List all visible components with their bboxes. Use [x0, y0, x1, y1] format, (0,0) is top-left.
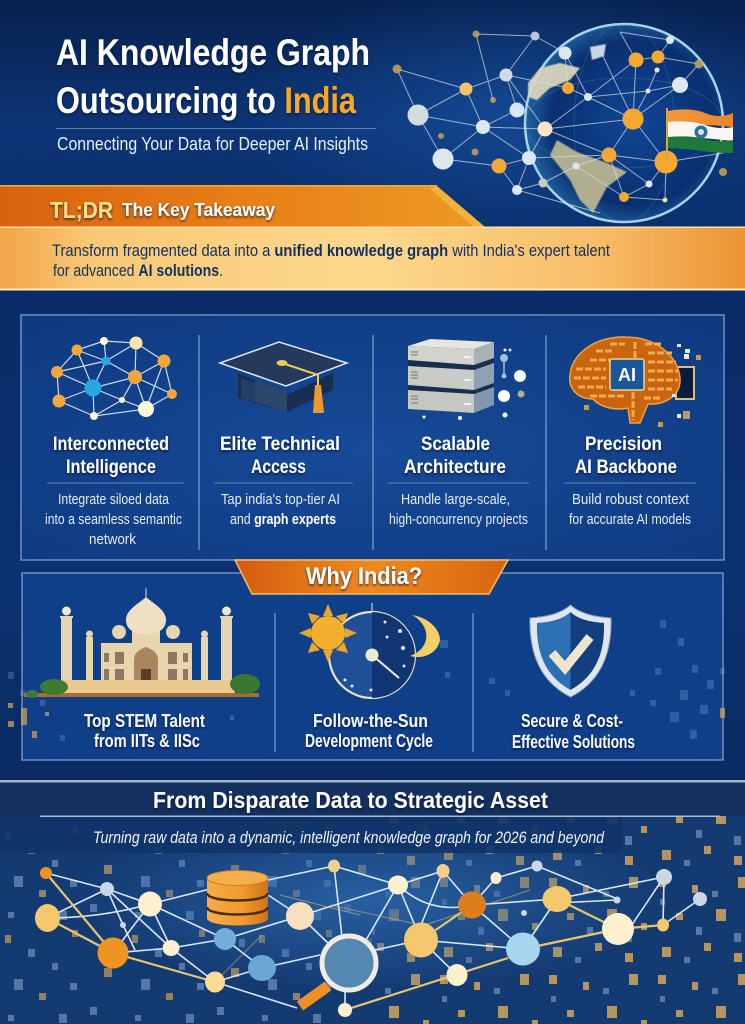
- icon: AI brain: [570, 337, 701, 427]
- takeaway panel: [0, 226, 745, 290]
- card 4 text: [569, 434, 691, 528]
- card 4 text: Build robust context: [572, 492, 689, 508]
- card 3 text: [389, 434, 528, 528]
- icon: database: [207, 870, 268, 926]
- card 2 text: Elite Technical: [220, 434, 340, 455]
- scattered data squares: [0, 812, 745, 1024]
- takeaway text: [52, 242, 610, 280]
- header section: [0, 0, 745, 240]
- icon: sun and clock: [299, 603, 440, 698]
- icon: India flag: [666, 108, 733, 160]
- icon: AI brain: AI: [618, 365, 636, 385]
- card 1 text: into a seamless semantic: [45, 512, 182, 528]
- why India banner: [235, 560, 508, 594]
- section subtitle: Turning raw data into a dynamic, intelligent knowledge graph for 2026 and beyond: [93, 829, 605, 847]
- icon: security shield: [530, 605, 611, 697]
- data squares decoration: [8, 620, 725, 741]
- bottom section: [0, 780, 745, 1024]
- column labels: [84, 711, 635, 752]
- card 2 text: Tap india's top-tier AI: [221, 492, 340, 508]
- panel: four benefits: [21, 315, 724, 560]
- title: Outsourcing to India: [56, 80, 356, 121]
- icon: Taj Mahal: [24, 588, 260, 698]
- card 4 text: Precision: [585, 434, 662, 455]
- TL;DR heading: TL;DR: [50, 197, 113, 223]
- subtitle: Connecting Your Data for Deeper AI Insights: [57, 133, 368, 154]
- TL;DR heading: [50, 197, 276, 223]
- takeaway text: Transform fragmented data into a unified knowledge graph with India's expert talent: [52, 242, 610, 260]
- column labels: Development Cycle: [305, 731, 433, 751]
- card 4 text: AI Backbone: [575, 457, 677, 478]
- column labels: Top STEM Talent: [84, 711, 205, 731]
- card 3 text: high-concurrency projects: [389, 512, 528, 528]
- why India banner: Why India?: [306, 563, 422, 590]
- card 2 text: and graph experts: [230, 512, 336, 528]
- section heading: From Disparate Data to Strategic Asset: [153, 787, 548, 813]
- TL;DR banner: [0, 185, 485, 227]
- icon: interconnected network: [51, 336, 177, 420]
- card 3 text: Handle large-scale,: [401, 492, 510, 508]
- column labels: Effective Solutions: [512, 732, 635, 752]
- card 4 text: for accurate AI models: [569, 512, 691, 528]
- icon: magnifying glass: [300, 936, 376, 1006]
- title: [56, 32, 370, 121]
- panel: why India: [8, 573, 725, 760]
- card 1 text: Integrate siloed data: [58, 492, 170, 508]
- column labels: from IITs & IISc: [94, 731, 200, 751]
- column labels: Secure & Cost-: [521, 711, 623, 731]
- takeaway text: for advanced AI solutions.: [53, 262, 223, 280]
- TL;DR heading: The Key Takeaway: [122, 199, 276, 220]
- title: AI Knowledge Graph: [56, 32, 370, 73]
- knowledge graph network: [35, 860, 707, 1017]
- icon: server stack: [408, 339, 526, 420]
- card 3 text: Architecture: [404, 457, 506, 478]
- network over globe: [392, 30, 727, 213]
- globe: [525, 24, 723, 222]
- card 1 text: network: [89, 532, 137, 548]
- heading band: [0, 780, 745, 853]
- card 1 text: [45, 434, 182, 548]
- card 3 text: Scalable: [421, 434, 490, 455]
- card 1 text: Intelligence: [66, 457, 156, 478]
- card 1 text: Interconnected: [53, 434, 169, 455]
- column labels: Follow-the-Sun: [313, 711, 428, 731]
- card 2 text: Access: [251, 457, 306, 478]
- icon: graduation cap: [220, 342, 347, 413]
- card 2 text: [220, 434, 340, 528]
